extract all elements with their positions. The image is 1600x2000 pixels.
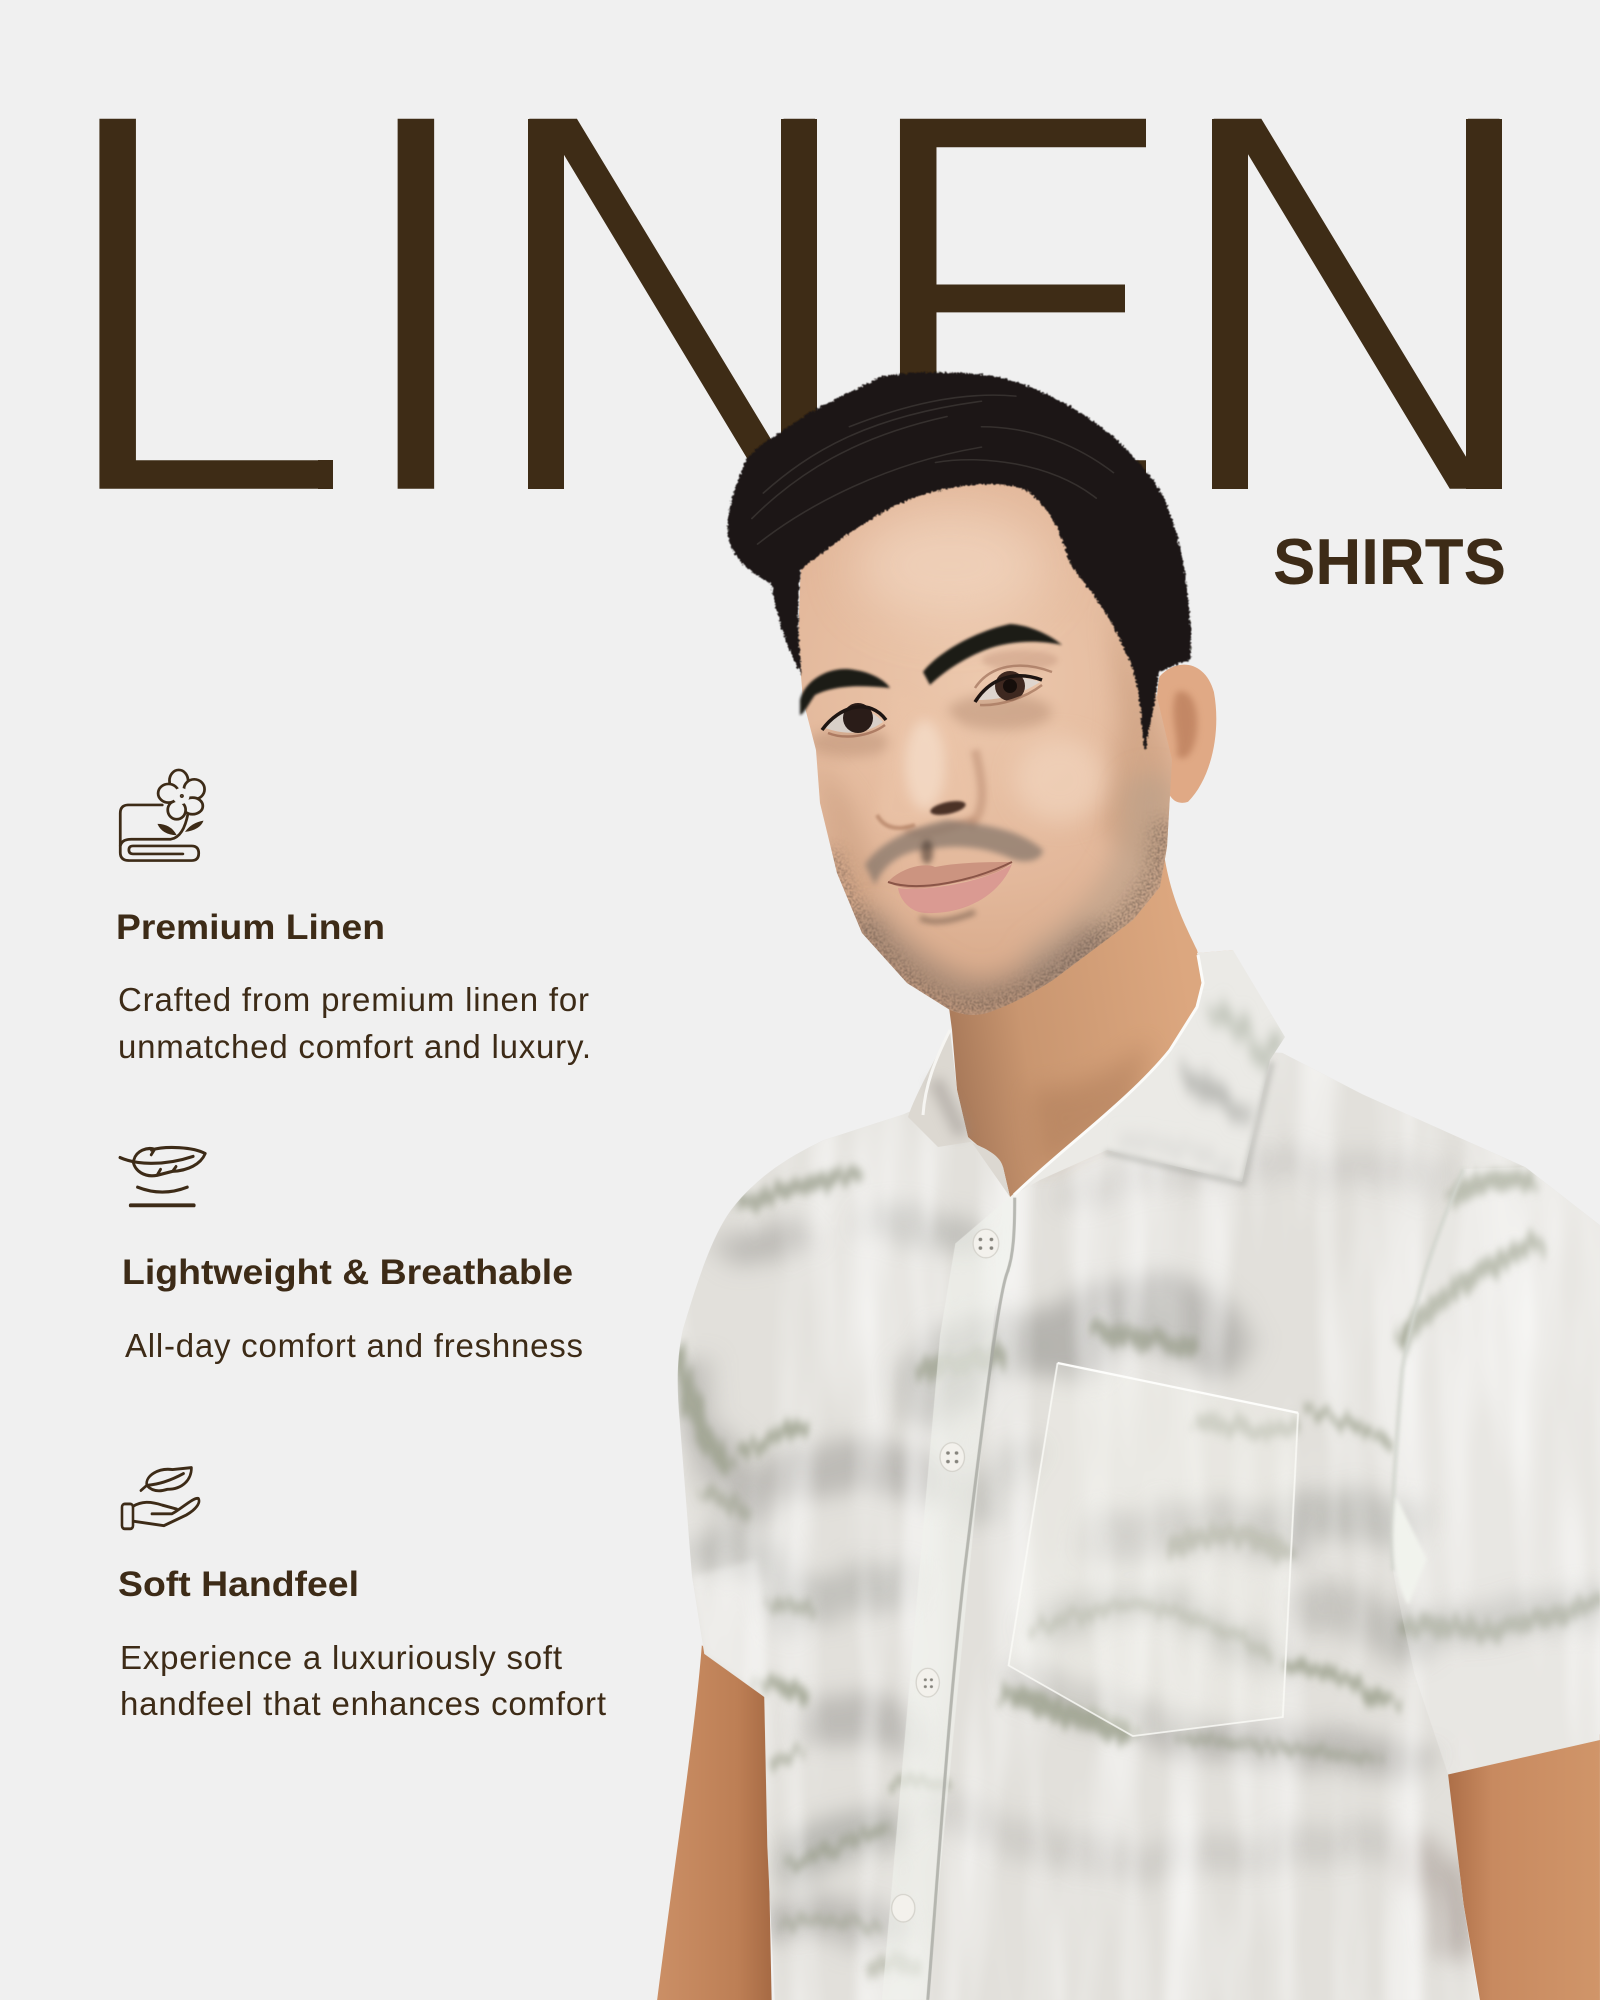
subtitle: SHIRTS: SHIRTS — [1273, 525, 1506, 598]
pocket — [1009, 1363, 1298, 1736]
collar — [908, 950, 1285, 1197]
feature: Premium Linen — [116, 770, 591, 1065]
description: handfeel that enhances comfort — [120, 1685, 606, 1722]
placket — [882, 1196, 1013, 2000]
neck — [948, 860, 1205, 1197]
photo: man in linen shirt — [609, 372, 1600, 2000]
description — [118, 981, 591, 1065]
icon: hand holding leaf — [122, 1468, 199, 1529]
right sleeve — [1392, 1167, 1600, 1774]
stubble — [832, 800, 1163, 1008]
title: LINEN: LINEN — [49, 0, 1550, 614]
left eye — [822, 703, 886, 736]
left sleeve — [692, 1559, 766, 1697]
collar left — [908, 1030, 1010, 1197]
eye socket shadow — [948, 694, 1052, 730]
feature: Lightweight & Breathable — [120, 1147, 583, 1364]
face — [798, 450, 1172, 1015]
tie-dye clouds — [683, 1165, 1600, 1932]
description: unmatched comfort and luxury. — [118, 1028, 591, 1065]
heading: Premium Linen — [116, 908, 385, 947]
neck shadow — [1030, 1040, 1150, 1170]
icon: feather — [120, 1147, 205, 1205]
collar inside back — [1197, 950, 1233, 985]
head — [728, 372, 1216, 1015]
right eye — [975, 666, 1052, 705]
description: All-day comfort and freshness — [125, 1327, 583, 1364]
face shading — [808, 510, 1172, 935]
nose — [877, 690, 982, 833]
description — [120, 1639, 606, 1722]
lips — [888, 862, 1012, 921]
left arm — [657, 1645, 772, 2000]
ear — [1157, 665, 1216, 803]
heading: Soft Handfeel — [118, 1565, 359, 1604]
tie-dye bands — [683, 1175, 1600, 1970]
buttons — [892, 1229, 999, 1922]
eyebrows — [800, 624, 1062, 715]
hair — [728, 372, 1191, 751]
right arm — [1447, 1734, 1600, 2000]
description: Experience a luxuriously soft — [120, 1639, 562, 1676]
fabric streaks — [609, 1031, 1600, 2000]
collar right — [1010, 950, 1285, 1197]
icon: folded fabric with flower — [120, 770, 205, 861]
shirt — [609, 1031, 1600, 2000]
feature: Soft Handfeel — [118, 1468, 606, 1722]
heading: Lightweight & Breathable — [122, 1253, 573, 1292]
description: Crafted from premium linen for — [118, 981, 589, 1018]
moustache — [865, 820, 1043, 885]
